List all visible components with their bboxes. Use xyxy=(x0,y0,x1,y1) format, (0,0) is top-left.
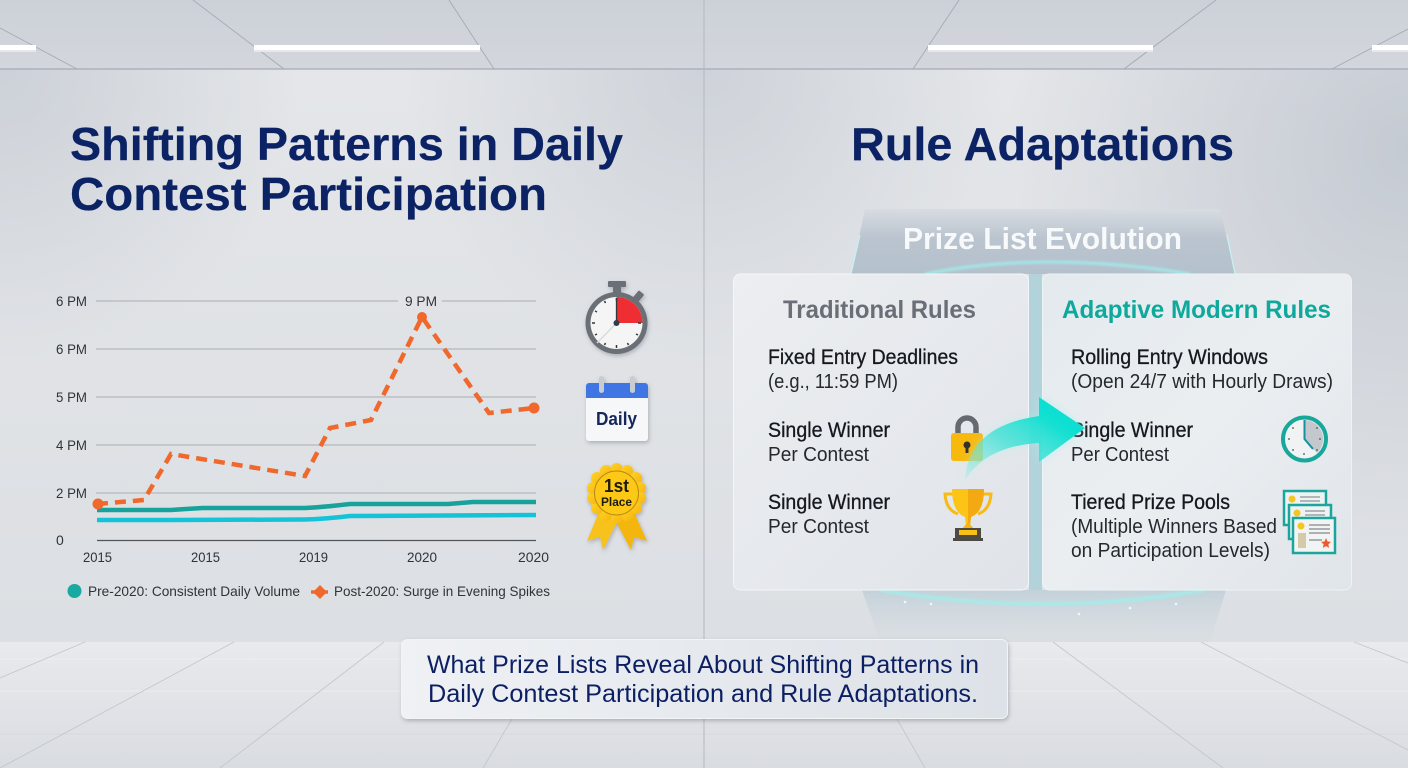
icon: first place medal xyxy=(587,463,647,550)
y axis labels: 6 PM xyxy=(56,341,87,357)
rule: single winner: Per Contest xyxy=(1071,444,1169,466)
centre gap glow xyxy=(1029,274,1042,590)
rule: single winner xyxy=(768,419,890,466)
title: rule adaptations: Rule Adaptations xyxy=(851,118,1234,170)
rule: single winner repeated xyxy=(768,491,890,538)
rule: single winner: Single Winner xyxy=(1071,419,1193,442)
cyan series xyxy=(97,515,536,520)
title: shifting patterns xyxy=(70,118,623,220)
orange series xyxy=(92,312,540,510)
lit edges xyxy=(851,235,1235,274)
icon: stopwatch xyxy=(586,281,648,354)
icon: clock xyxy=(1283,418,1326,460)
y axis labels: 5 PM xyxy=(56,389,87,405)
icon: padlock xyxy=(951,418,983,461)
rule: tiered prize pools xyxy=(1071,491,1277,562)
rule: fixed entry deadlines: (e.g., 11:59 PM) xyxy=(768,371,898,393)
rule: single winner repeated: Per Contest xyxy=(768,516,869,538)
rule: rolling entry windows xyxy=(1071,346,1333,393)
card: adaptive modern rules xyxy=(1042,274,1352,590)
title: shifting patterns: Shifting Patterns in Daily xyxy=(70,118,623,170)
sparks xyxy=(904,601,1177,615)
icon: daily calendar: Daily xyxy=(596,409,637,429)
y axis labels: 2 PM xyxy=(56,485,87,501)
peak label: 9 PM xyxy=(405,293,437,309)
chart legend: Pre-2020: Consistent Daily Volume xyxy=(88,583,300,599)
glow ring xyxy=(880,262,1205,604)
rule: single winner xyxy=(1071,419,1193,466)
rule: tiered prize pools: on Participation Levels) xyxy=(1071,540,1270,562)
x axis labels: 2015 xyxy=(191,549,220,565)
panel heading: Prize List Evolution xyxy=(903,221,1182,256)
card heading: Traditional Rules xyxy=(783,296,976,324)
title: shifting patterns: Contest Participation xyxy=(70,168,547,220)
arrow: traditional to modern xyxy=(965,397,1085,480)
icon: first place medal: 1st xyxy=(604,476,629,496)
header trapezoid xyxy=(851,209,1235,274)
rule: rolling entry windows: (Open 24/7 with Hourly Draws) xyxy=(1071,371,1333,393)
card: traditional rules xyxy=(734,274,1028,590)
line chart xyxy=(56,293,549,565)
x axis labels xyxy=(83,549,549,565)
y axis labels: 4 PM xyxy=(56,437,87,453)
y axis labels: 0 xyxy=(56,532,64,548)
rule: single winner: Single Winner xyxy=(768,419,890,442)
rule: rolling entry windows: Rolling Entry Windows xyxy=(1071,346,1268,369)
card heading: Adaptive Modern Rules xyxy=(1062,296,1331,324)
x axis labels: 2020 xyxy=(407,549,437,565)
callout: bottom summary: What Prize Lists Reveal About Shifting Patterns in xyxy=(427,651,979,679)
icon: daily calendar xyxy=(586,376,648,441)
icon: tiered certificates xyxy=(1284,491,1335,553)
callout: bottom summary xyxy=(402,640,1008,718)
teal series xyxy=(97,502,536,510)
rule: single winner repeated: Single Winner xyxy=(768,491,890,514)
x axis labels: 2020 xyxy=(518,549,549,565)
icon: first place medal: Place xyxy=(601,497,632,509)
rule: tiered prize pools: Tiered Prize Pools xyxy=(1071,491,1230,514)
rule: fixed entry deadlines: Fixed Entry Deadlines xyxy=(768,346,958,369)
chart legend xyxy=(68,583,550,599)
rule: fixed entry deadlines xyxy=(768,346,958,393)
y axis labels: 6 PM xyxy=(56,293,87,309)
callout: bottom summary: Daily Contest Participation and Rule Adaptations. xyxy=(428,680,978,708)
x axis labels: 2015 xyxy=(83,549,112,565)
icon: trophy xyxy=(945,489,991,541)
rule: tiered prize pools: (Multiple Winners Based xyxy=(1071,516,1277,538)
x axis labels: 2019 xyxy=(299,549,328,565)
lower backdrop xyxy=(862,590,1226,642)
chart legend: Post-2020: Surge in Evening Spikes xyxy=(334,583,550,599)
y axis labels xyxy=(56,293,87,548)
panel: prize list evolution xyxy=(851,209,1235,642)
rule: single winner: Per Contest xyxy=(768,444,869,466)
